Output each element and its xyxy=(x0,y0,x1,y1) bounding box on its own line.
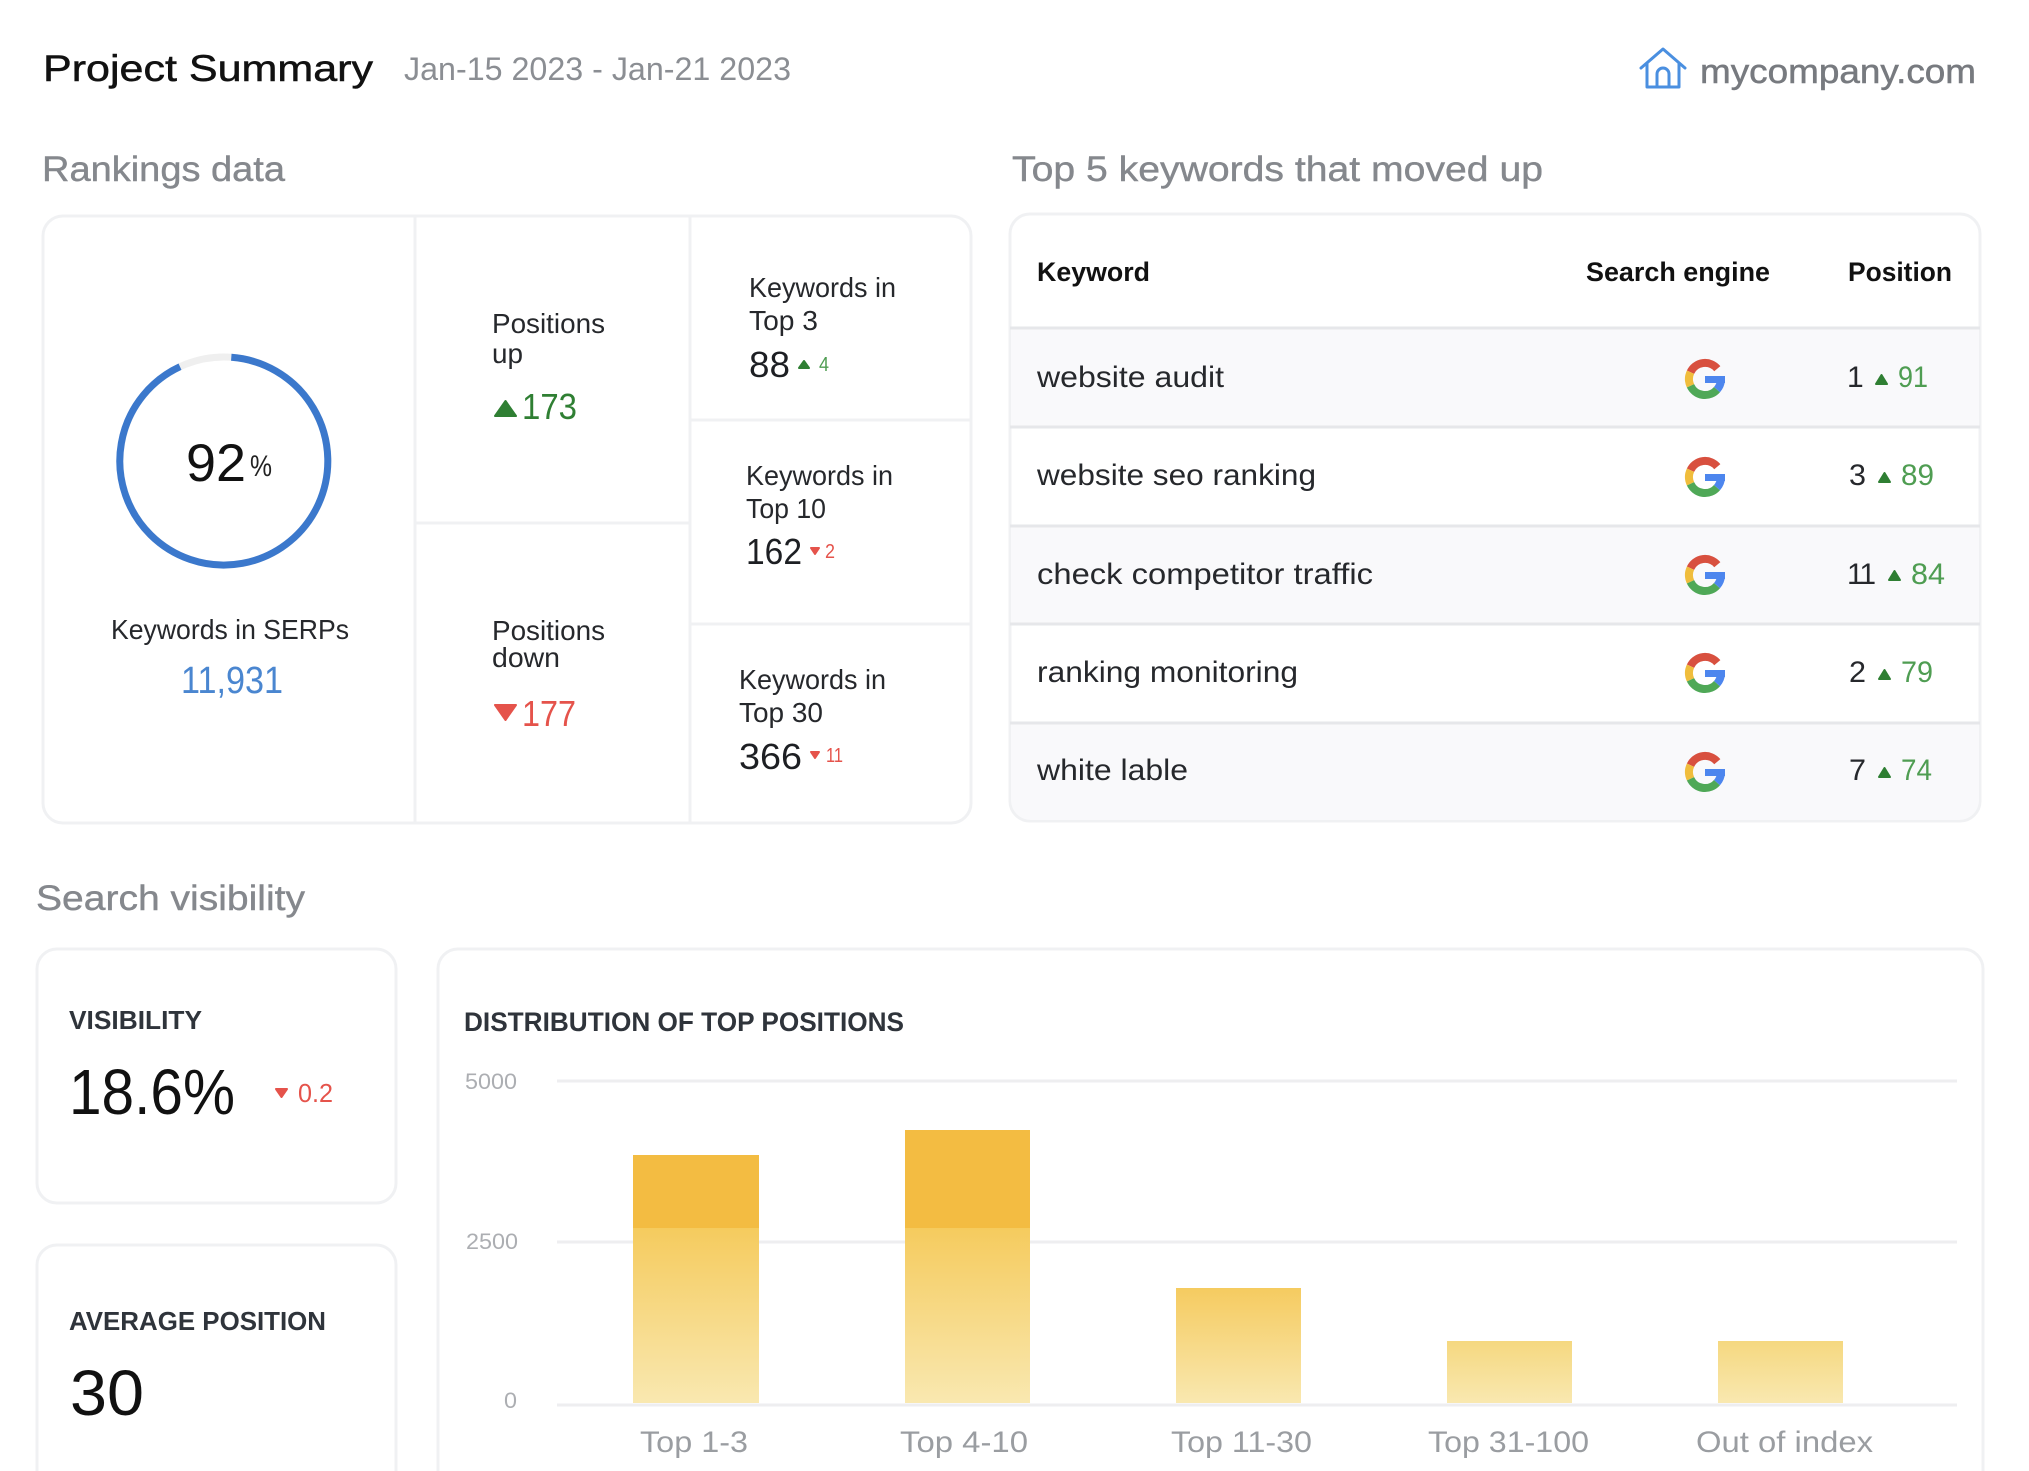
panel: average position xyxy=(37,1245,396,1471)
row: website seo ranking xyxy=(1036,459,1934,493)
row: check competitor traffic: check competitor traffic xyxy=(1037,558,1373,591)
panel: average position: 30 xyxy=(70,1357,144,1429)
row: white lable xyxy=(1036,754,1932,788)
donut chart: keywords in SERPs: % xyxy=(250,450,272,483)
row: website seo ranking: 3 xyxy=(1849,459,1866,492)
panel: rankings data xyxy=(43,216,971,823)
stat: positions up: up xyxy=(492,338,523,369)
stat: keywords in top 3 xyxy=(749,272,896,385)
table card frame xyxy=(1010,214,1980,821)
domain name: mycompany.com xyxy=(1700,53,1976,91)
chart title: DISTRIBUTION OF TOP POSITIONS xyxy=(464,1007,904,1037)
rankings card frame xyxy=(43,216,971,823)
row: white lable: 74 xyxy=(1901,754,1932,787)
row: website audit xyxy=(1036,361,1928,395)
heading: search visibility: Search visibility xyxy=(36,879,306,918)
stat: positions down: down xyxy=(492,642,560,673)
y axis labels: 0 xyxy=(504,1388,517,1413)
icon: house xyxy=(1641,49,1685,87)
stat: positions down xyxy=(492,615,605,734)
x axis labels: Out of index xyxy=(1696,1426,1873,1459)
heading: rankings data: Rankings data xyxy=(42,150,286,189)
row: white lable: white lable xyxy=(1036,754,1188,787)
panel: visibility: 18.6% xyxy=(69,1056,235,1128)
stat: positions up: Positions xyxy=(492,308,605,339)
stat: keywords in top 10: 2 xyxy=(825,541,835,563)
stat: keywords in top 30: Keywords in xyxy=(739,664,886,695)
table header: Search engine xyxy=(1586,257,1770,287)
x axis labels: Top 11-30 xyxy=(1171,1426,1312,1459)
row: ranking monitoring: ranking monitoring xyxy=(1037,656,1298,689)
x axis labels: Top 1-3 xyxy=(640,1426,748,1459)
row: check competitor traffic xyxy=(1037,558,1945,591)
stat: keywords in top 10: 162 xyxy=(746,531,802,572)
row: ranking monitoring xyxy=(1037,656,1933,689)
stat: keywords in top 30 xyxy=(739,664,886,777)
row: ranking monitoring: 79 xyxy=(1901,656,1933,689)
stat: keywords in top 30: Top 30 xyxy=(739,697,823,728)
table header: Keyword xyxy=(1037,257,1150,287)
site domain with home icon xyxy=(1641,49,1976,91)
row: website audit: 91 xyxy=(1898,361,1928,394)
panel: average position: AVERAGE POSITION xyxy=(69,1306,326,1336)
bar: Out of index xyxy=(1718,1341,1843,1403)
date range: Jan-15 2023 - Jan-21 2023 xyxy=(404,51,791,87)
row: website audit: website audit xyxy=(1036,361,1225,394)
x axis labels: Top 31-100 xyxy=(1428,1426,1589,1459)
stat: keywords in top 3: 88 xyxy=(749,344,790,385)
y axis labels xyxy=(465,1069,518,1413)
row: website audit: 1 xyxy=(1847,361,1864,394)
donut chart: keywords in SERPs: 92 xyxy=(186,434,246,493)
table header: Position xyxy=(1848,257,1952,287)
row: website seo ranking: 89 xyxy=(1901,459,1934,492)
stat: positions down: 177 xyxy=(522,693,576,734)
stat: keywords in SERPs xyxy=(111,614,349,702)
bar: Top 11-30 xyxy=(1176,1288,1301,1403)
panel: top 5 keywords table xyxy=(1010,214,1980,821)
panel: visibility: VISIBILITY xyxy=(69,1005,202,1035)
bar: Top 4-10 xyxy=(905,1130,1030,1403)
donut chart: keywords in SERPs xyxy=(120,357,328,565)
stat: keywords in top 3: Top 3 xyxy=(749,305,818,336)
x axis labels: Top 4-10 xyxy=(900,1426,1028,1459)
bar: Top 31-100 xyxy=(1447,1341,1572,1403)
row: ranking monitoring: 2 xyxy=(1849,656,1866,689)
stat: keywords in top 10: Top 10 xyxy=(746,493,826,524)
bar chart xyxy=(633,1130,1843,1403)
stat: keywords in top 3: 4 xyxy=(819,354,829,376)
panel: visibility: 0.2 xyxy=(298,1078,333,1108)
table header xyxy=(1037,257,1952,287)
heading: top 5 keywords: Top 5 keywords that moved up xyxy=(1012,150,1543,189)
stat: keywords in top 10: Keywords in xyxy=(746,460,893,491)
stat: positions up xyxy=(492,308,605,427)
row: website seo ranking: website seo ranking xyxy=(1036,459,1316,492)
x axis labels xyxy=(640,1426,1873,1459)
stat: keywords in top 3: Keywords in xyxy=(749,272,896,303)
panel: visibility xyxy=(37,949,396,1203)
title: Project Summary xyxy=(43,48,374,89)
row: check competitor traffic: 84 xyxy=(1911,558,1945,591)
y axis labels: 2500 xyxy=(466,1229,518,1254)
y axis labels: 5000 xyxy=(465,1069,517,1094)
row: check competitor traffic: 11 xyxy=(1847,558,1876,591)
stat: keywords in top 10 xyxy=(746,460,893,572)
bar: Top 1-3 xyxy=(633,1155,759,1403)
stat: keywords in SERPs: 11,931 xyxy=(181,660,283,702)
stat: keywords in SERPs: Keywords in SERPs xyxy=(111,614,349,645)
stat: positions down: Positions xyxy=(492,615,605,646)
panel: distribution of top positions xyxy=(438,949,1983,1471)
stat: keywords in top 30: 11 xyxy=(826,745,843,767)
row: white lable: 7 xyxy=(1849,754,1866,787)
stat: positions up: 173 xyxy=(522,386,577,427)
stat: keywords in top 30: 366 xyxy=(739,736,802,777)
